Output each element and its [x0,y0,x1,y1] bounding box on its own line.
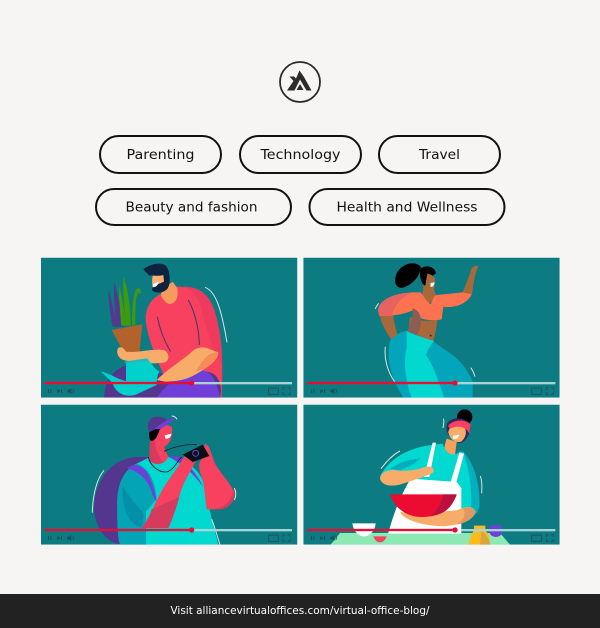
small bowl pink [373,536,387,542]
small bowl white [352,523,376,536]
tag: Beauty and fashion: Beauty and fashion [126,200,258,216]
table [331,533,510,545]
tag: Technology [240,136,361,173]
player controls [311,388,553,394]
plant [109,277,142,356]
man [104,264,227,398]
yellow bottle [469,526,490,545]
tag: Travel [379,136,500,173]
footer bar [0,594,600,628]
progress bar [307,380,555,386]
purple cup [489,525,502,537]
tag: Beauty and fashion [96,189,291,225]
logo [280,62,320,102]
video panel: photographer [41,405,297,545]
player controls [48,535,290,541]
dancer [375,263,478,398]
photographer [92,416,236,545]
player controls [48,388,290,394]
tag: Parenting [100,136,221,173]
video panel: man watering plant [41,258,297,398]
tag: Travel: Travel [418,147,460,163]
footer bar: Visit alliancevirtualoffices.com/virtual-office-blog/ [170,604,430,617]
progress bar [44,380,292,386]
cook [380,409,479,534]
progress bar [307,527,555,533]
player controls [311,535,553,541]
video panel: dancing woman [303,258,560,398]
tag: Health and Wellness: Health and Wellness [336,200,478,216]
tag: Health and Wellness [310,189,504,225]
video panel: woman cooking [303,405,560,545]
tag: Technology: Technology [259,147,341,163]
tag: Parenting: Parenting [126,147,194,163]
mixing bowl [390,494,457,517]
progress bar [44,527,292,533]
watering can [101,358,159,396]
